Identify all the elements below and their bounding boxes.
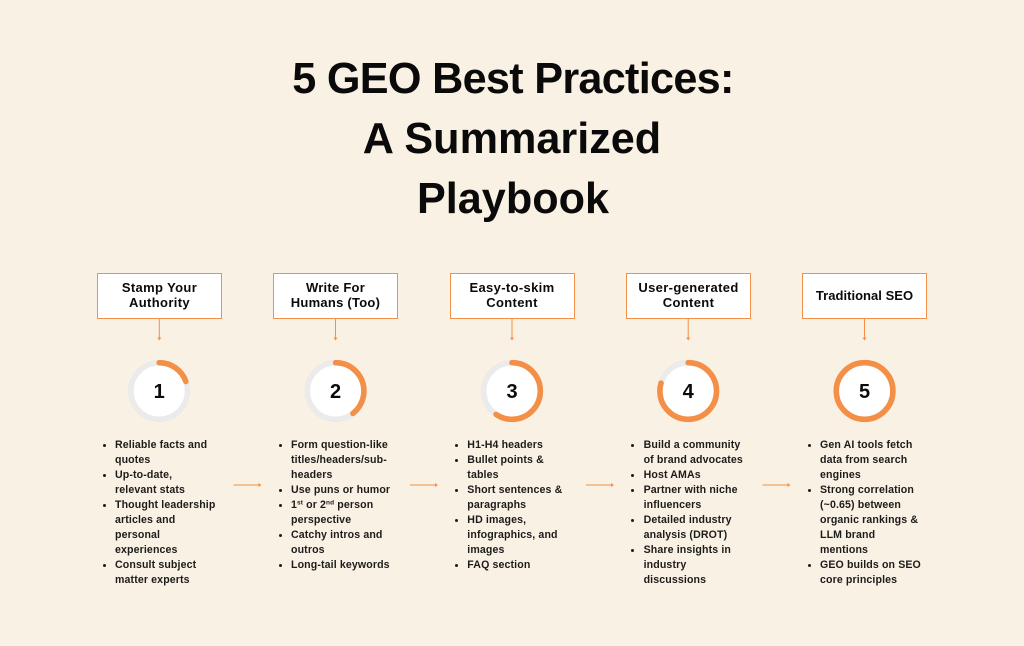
bullet list: Write For Humans: perspective [291,514,351,526]
bullet list: Stamp Your Authority: Up-to-date, [115,469,172,481]
arrow: list 4 to list 5 [762,483,790,487]
bullet list: User-generated Content: Detailed industry [644,514,732,526]
bullet list: Write For Humans: Catchy intros and [291,529,383,541]
bullet list: Stamp Your Authority: articles and [115,514,175,526]
bullet list: Traditional SEO: LLM brand [820,529,875,541]
ring 2: 40 percent [307,363,364,419]
bullet list: Traditional SEO: core principles [820,574,897,586]
bullet list: Traditional SEO: Gen AI tools fetch [820,439,912,451]
ring 3: 60 percent: 3 [506,381,518,403]
bullet list: User-generated Content: industry [644,559,686,571]
ring 4: 80 percent [660,363,716,419]
ring 1: 20 percent [131,363,188,419]
bullet list: Traditional SEO: engines [820,469,861,481]
heading box: Easy-to-skim Content [450,273,574,318]
arrow: list 2 to list 3 [410,483,438,487]
bullet list: Stamp Your Authority: Thought leadership [115,499,215,511]
bullet list: Traditional SEO: GEO builds on SEO [820,559,921,571]
bullet list: Easy-to-skim Content: FAQ section [467,559,530,571]
bullet list: Traditional SEO: organic rankings & [820,514,918,526]
heading box: Easy-to-skim Content: Content [486,295,538,310]
arrow: box 3 to ring 3 [510,318,514,340]
bullet list: User-generated Content: Partner with niche [644,484,738,496]
ring 5: 100 percent: 5 [859,381,870,403]
heading box: Traditional SEO [802,273,927,318]
bullet list: Traditional SEO: (~0.65) between [820,499,901,511]
bullet list: Stamp Your Authority: Reliable facts and [115,439,207,451]
title: A Summarized [363,115,661,163]
bullet list: Traditional SEO: Strong correlation [820,484,914,496]
bullet list: Write For Humans: titles/headers/sub- [291,454,387,466]
ring 2: 40 percent: 2 [330,381,341,403]
bullet list: Stamp Your Authority: relevant stats [115,484,185,496]
bullet list: Easy-to-skim Content: tables [467,469,499,481]
ring 5: 100 percent [836,363,893,419]
bullet list: User-generated Content: influencers [644,499,701,511]
bullet list: Write For Humans: Use puns or humor [291,484,390,496]
bullet list: Write For Humans: headers [291,469,332,481]
bullet list: Stamp Your Authority: quotes [115,454,150,466]
bullet list: Write For Humans: outros [291,544,325,556]
heading box: User-generated Content [626,273,751,318]
arrow: box 4 to ring 4 [686,318,690,340]
arrow: list 3 to list 4 [586,483,614,487]
bullet list: Easy-to-skim Content: infographics, and [467,529,558,541]
bullet list: User-generated Content: of brand advocates [644,454,743,466]
bullet list: User-generated Content: Build a community [644,439,740,451]
bullet list: Traditional SEO: data from search [820,454,907,466]
bullet list: Easy-to-skim Content: images [467,544,505,556]
ring 3: 60 percent [484,363,540,419]
heading box: Easy-to-skim Content: Easy-to-skim [469,280,555,295]
bullet list: Easy-to-skim Content: paragraphs [467,499,526,511]
heading box: User-generated Content: User-generated [638,280,739,295]
bullet list: Stamp Your Authority: matter experts [115,574,190,586]
arrow: box 5 to ring 5 [862,318,866,340]
bullet list: Easy-to-skim Content: H1-H4 headers [467,439,543,451]
bullet list: Write For Humans: Long-tail keywords [291,559,390,571]
title [292,55,734,223]
ring 4: 80 percent: 4 [683,381,695,403]
heading box: Write For Humans (Too) [273,273,398,318]
bullet list: Stamp Your Authority: personal [115,529,160,541]
bullet list: Traditional SEO: mentions [820,544,868,556]
arrow: list 1 to list 2 [234,483,262,487]
title: Playbook [417,175,609,223]
bullet list: Easy-to-skim Content: HD images, [467,514,526,526]
bullet list: Stamp Your Authority: Consult subject [115,559,196,571]
heading box: Stamp Your Authority: Authority [129,295,190,310]
arrow: box 2 to ring 2 [334,318,338,340]
bullet list: Easy-to-skim Content: Bullet points & [467,454,544,466]
bullet list: Write For Humans: Form question-like [291,439,388,451]
bullet list: User-generated Content: discussions [644,574,706,586]
bullet list: Easy-to-skim Content: Short sentences & [467,484,562,496]
bullet list: User-generated Content: Host AMAs [644,469,701,481]
bullet list: Easy-to-skim Content [455,439,562,571]
bullet list: Traditional SEO [808,439,921,586]
heading box: Write For Humans (Too): Write For [306,280,365,295]
arrow: box 1 to ring 1 [157,318,161,340]
heading box: Stamp Your Authority: Stamp Your [122,280,197,295]
heading box: Write For Humans (Too): Humans (Too) [291,295,380,310]
bullet list: Stamp Your Authority: experiences [115,544,178,556]
heading box: Traditional SEO: Traditional SEO [816,288,913,303]
bullet list: Write For Humans: 1st or 2nd person [291,499,373,511]
heading box: User-generated Content: Content [663,295,714,310]
bullet list: Write For Humans [279,439,390,571]
bullet list: Stamp Your Authority [103,439,215,586]
bullet list: User-generated Content: Share insights in [644,544,731,556]
title: 5 GEO Best Practices: [292,55,734,103]
ring 1: 20 percent: 1 [154,381,165,403]
heading box: Stamp Your Authority [97,273,222,318]
bullet list: User-generated Content: analysis (DROT) [644,529,727,541]
bullet list: User-generated Content [631,439,743,586]
